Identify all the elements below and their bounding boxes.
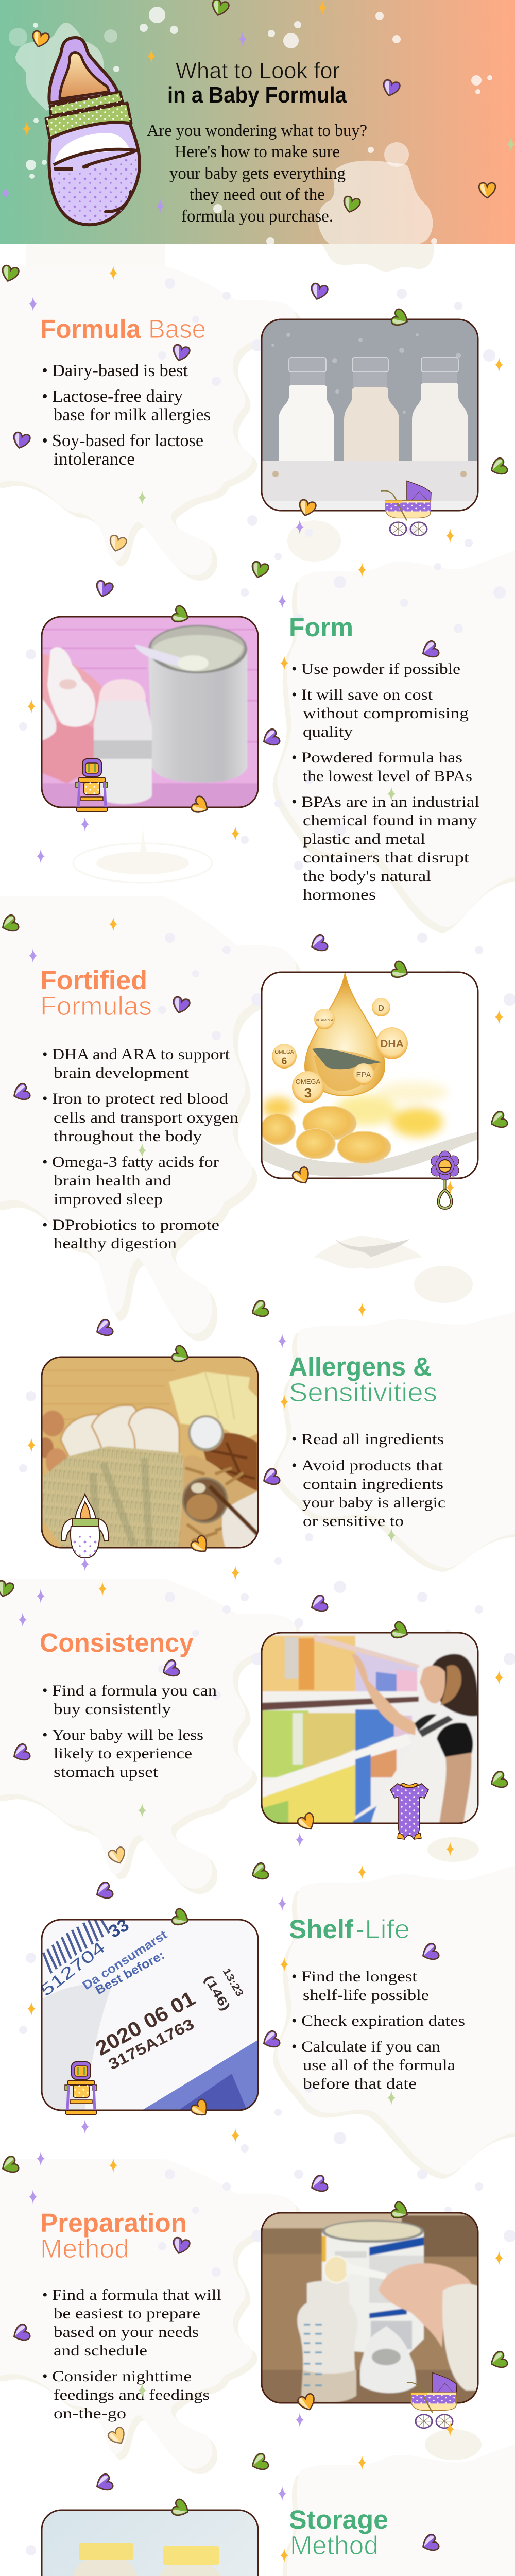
bullet list: contain ingredients xyxy=(303,1476,443,1493)
bullet list: • xyxy=(42,1682,48,1699)
bullet list xyxy=(291,1968,465,2092)
bullet list: without compromising xyxy=(303,705,469,722)
photo: omega oil drop xyxy=(261,972,478,1179)
bullet list: quality xyxy=(303,723,353,740)
bullet list: based on your needs xyxy=(54,2324,199,2341)
bullet list: your baby is allergic xyxy=(302,1494,445,1511)
photo: scooping formula xyxy=(259,2210,480,2406)
panel: Storage Method xyxy=(41,2498,387,2576)
intro text: your baby gets everything xyxy=(169,164,346,183)
bullet list xyxy=(42,1046,238,1252)
photo: omega oil drop: EPA xyxy=(356,1071,371,1079)
heading: Formulas xyxy=(40,991,152,1021)
bullet list: Powdered formula has xyxy=(301,749,462,766)
photo: omega oil drop: 3 xyxy=(304,1085,312,1100)
bullet list: • xyxy=(42,361,48,380)
bullet list xyxy=(291,660,479,903)
photo: expiration date label: (146) xyxy=(201,1973,233,2013)
bullet list: • xyxy=(291,1431,297,1448)
bullet list xyxy=(42,2286,221,2422)
bullet list: • xyxy=(291,793,297,810)
photo: expiration date label: 13:23 xyxy=(220,1966,246,1998)
photo: expiration date label: Best before: xyxy=(93,1948,167,1997)
heading: Storage xyxy=(289,2505,388,2534)
bullet list: stomach upset xyxy=(54,1764,159,1781)
bullet list: Avoid products that xyxy=(301,1457,443,1474)
bullet list: likely to experience xyxy=(54,1745,192,1762)
bullet list: Find a formula that will xyxy=(52,2286,221,2303)
panel: Consistency xyxy=(40,1628,480,1826)
photo: expiration date label: Da consumarst xyxy=(80,1928,170,1993)
photo: omega oil drop: DHA xyxy=(380,1038,404,1050)
icon: onesie xyxy=(390,1783,428,1839)
photo: expiration date label: 33 xyxy=(106,1915,132,1942)
bullet list xyxy=(42,1682,217,1781)
panel: Fortified Formulas xyxy=(40,965,478,1252)
icon: high chair, section six xyxy=(65,2062,97,2114)
photo: omega oil drop: VITAMIN A xyxy=(316,1019,333,1022)
bullet list: Use powder if possible xyxy=(301,660,460,677)
bullet list xyxy=(291,1431,445,1530)
bullet list: Your baby will be less xyxy=(52,1726,203,1743)
heading: Preparation xyxy=(40,2208,187,2238)
bullet list: Read all ingredients xyxy=(301,1431,444,1448)
bullet list: • xyxy=(291,660,297,677)
icon: stroller, section one xyxy=(381,481,431,536)
bullet list: Dairy-based is best xyxy=(52,361,188,380)
bullet list: Consider nighttime xyxy=(52,2368,192,2385)
bullet list: Lactose-free dairy xyxy=(52,387,183,406)
bullet list: be easiest to prepare xyxy=(54,2305,200,2322)
panel: Allergens & Sensitivities xyxy=(37,1352,445,1551)
heading xyxy=(289,2505,388,2560)
photo: omega oil drop: OMEGA xyxy=(274,1049,294,1055)
heading xyxy=(40,2208,187,2263)
bullet list: • xyxy=(291,2012,297,2029)
heading: Method xyxy=(40,2234,129,2263)
heading: Fortified xyxy=(40,965,147,995)
intro text: Are you wondering what to buy? xyxy=(147,122,367,140)
icon: high chair, section two xyxy=(76,759,108,811)
bullet list: the body's natural xyxy=(303,868,431,885)
intro text: they need out of the xyxy=(190,185,325,204)
bullet list: use all of the formula xyxy=(303,2057,455,2074)
bullet list: Calculate if you can xyxy=(301,2038,440,2055)
bullet list: buy consistently xyxy=(54,1701,171,1718)
panel: Preparation Method xyxy=(40,2208,480,2422)
bullet list: brain development xyxy=(54,1064,190,1081)
heading: Formula xyxy=(40,314,141,344)
photo: omega oil drop: 6 xyxy=(282,1056,287,1067)
heading xyxy=(289,1352,437,1407)
panel: Formula Base xyxy=(40,314,478,511)
bullet list: DProbiotics to promote xyxy=(52,1216,219,1233)
bullet list: on-the-go xyxy=(54,2405,126,2422)
icon: flower rattle xyxy=(431,1151,459,1208)
bullet list: • xyxy=(42,1090,48,1107)
heading: Base xyxy=(148,314,206,344)
bullet list: before that date xyxy=(303,2075,417,2092)
heading: Allergens & xyxy=(289,1352,432,1381)
photo: expiration date label: 3175A1763 xyxy=(106,2015,197,2073)
bullet list: throughout the body xyxy=(54,1128,202,1145)
bullet list: BPAs are in an industrial xyxy=(301,793,479,810)
heading xyxy=(289,1914,410,1944)
heading: Consistency xyxy=(40,1628,194,1657)
heading: -Life xyxy=(355,1914,410,1944)
title: What to Look for xyxy=(176,58,340,83)
bullet list: Omega-3 fatty acids for xyxy=(52,1154,219,1171)
photo: expiration date label: 2020 06 01 xyxy=(92,1987,199,2060)
title xyxy=(167,58,347,108)
bullet list: hormones xyxy=(303,886,376,903)
photo: supermarket shelves xyxy=(259,1630,480,1826)
photo: allergen foods xyxy=(37,1354,261,1551)
bullet list: intolerance xyxy=(54,450,135,469)
bullet list: • xyxy=(42,2368,48,2385)
bullet list: feedings and feedings xyxy=(54,2386,210,2403)
photo: expiration date label: 512704 xyxy=(37,1938,109,2000)
intro text xyxy=(147,122,367,226)
photo: milk bottles xyxy=(261,319,478,511)
icon: sippy cup xyxy=(62,1494,108,1558)
photo: stored milk bottles xyxy=(41,2510,259,2576)
bullet list: • xyxy=(291,749,297,766)
bullet list: shelf-life possible xyxy=(303,1987,429,2004)
bullet list: or sensitive to xyxy=(303,1513,404,1530)
heading xyxy=(40,965,152,1021)
bullet list: Find the longest xyxy=(301,1968,418,1985)
bullet list xyxy=(42,361,211,469)
icon: baby bottle xyxy=(46,38,140,225)
bullet list: and schedule xyxy=(54,2342,147,2359)
bullet list: • xyxy=(291,1457,297,1474)
bullet list: Check expiration dates xyxy=(301,2012,465,2029)
bullet list: • xyxy=(291,2038,297,2055)
photo: powder can xyxy=(39,613,261,811)
bullet list: • xyxy=(291,686,297,703)
heading: Sensitivities xyxy=(289,1378,437,1407)
bullet list: base for milk allergies xyxy=(54,405,211,425)
bullet list: brain health and xyxy=(54,1172,171,1189)
icon: stroller, section seven xyxy=(407,2372,457,2428)
bullet list: improved sleep xyxy=(54,1191,163,1208)
photo: omega oil drop: D xyxy=(378,1004,384,1013)
bullet list: DHA and ARA to support xyxy=(52,1046,230,1063)
photo: expiration date label xyxy=(37,1915,259,2111)
bullet list: • xyxy=(42,1216,48,1233)
heading: Shelf xyxy=(289,1914,354,1944)
panel: Form xyxy=(39,613,479,903)
bullet list: healthy digestion xyxy=(54,1235,177,1252)
bullet list: • xyxy=(291,1968,297,1985)
bullet list: Iron to protect red blood xyxy=(52,1090,228,1107)
bullet list: Soy-based for lactose xyxy=(52,431,203,450)
panel: Shelf-Life xyxy=(37,1914,465,2111)
heading xyxy=(40,314,206,344)
intro text: formula you purchase. xyxy=(181,207,333,226)
bullet list: chemical found in many xyxy=(303,812,477,829)
bullet list: containers that disrupt xyxy=(303,849,470,866)
title: in a Baby Formula xyxy=(167,82,347,108)
bullet list: It will save on cost xyxy=(301,686,433,703)
bullet list: Find a formula you can xyxy=(52,1682,217,1699)
bullet list: plastic and metal xyxy=(303,831,425,848)
bullet list: • xyxy=(42,387,48,406)
intro text: Here's how to make sure xyxy=(175,143,340,161)
bullet list: • xyxy=(42,2286,48,2303)
bullet list: • xyxy=(42,1726,48,1743)
bullet list: the lowest level of BPAs xyxy=(303,768,472,785)
photo: omega oil drop: OMEGA xyxy=(296,1078,321,1086)
header panel xyxy=(0,0,515,245)
bullet list: • xyxy=(42,1046,48,1063)
bullet list: • xyxy=(42,431,48,450)
bullet list: • xyxy=(42,1154,48,1171)
heading: Form xyxy=(289,613,353,642)
heading: Method xyxy=(290,2531,379,2560)
bullet list: cells and transport oxygen xyxy=(54,1109,238,1126)
